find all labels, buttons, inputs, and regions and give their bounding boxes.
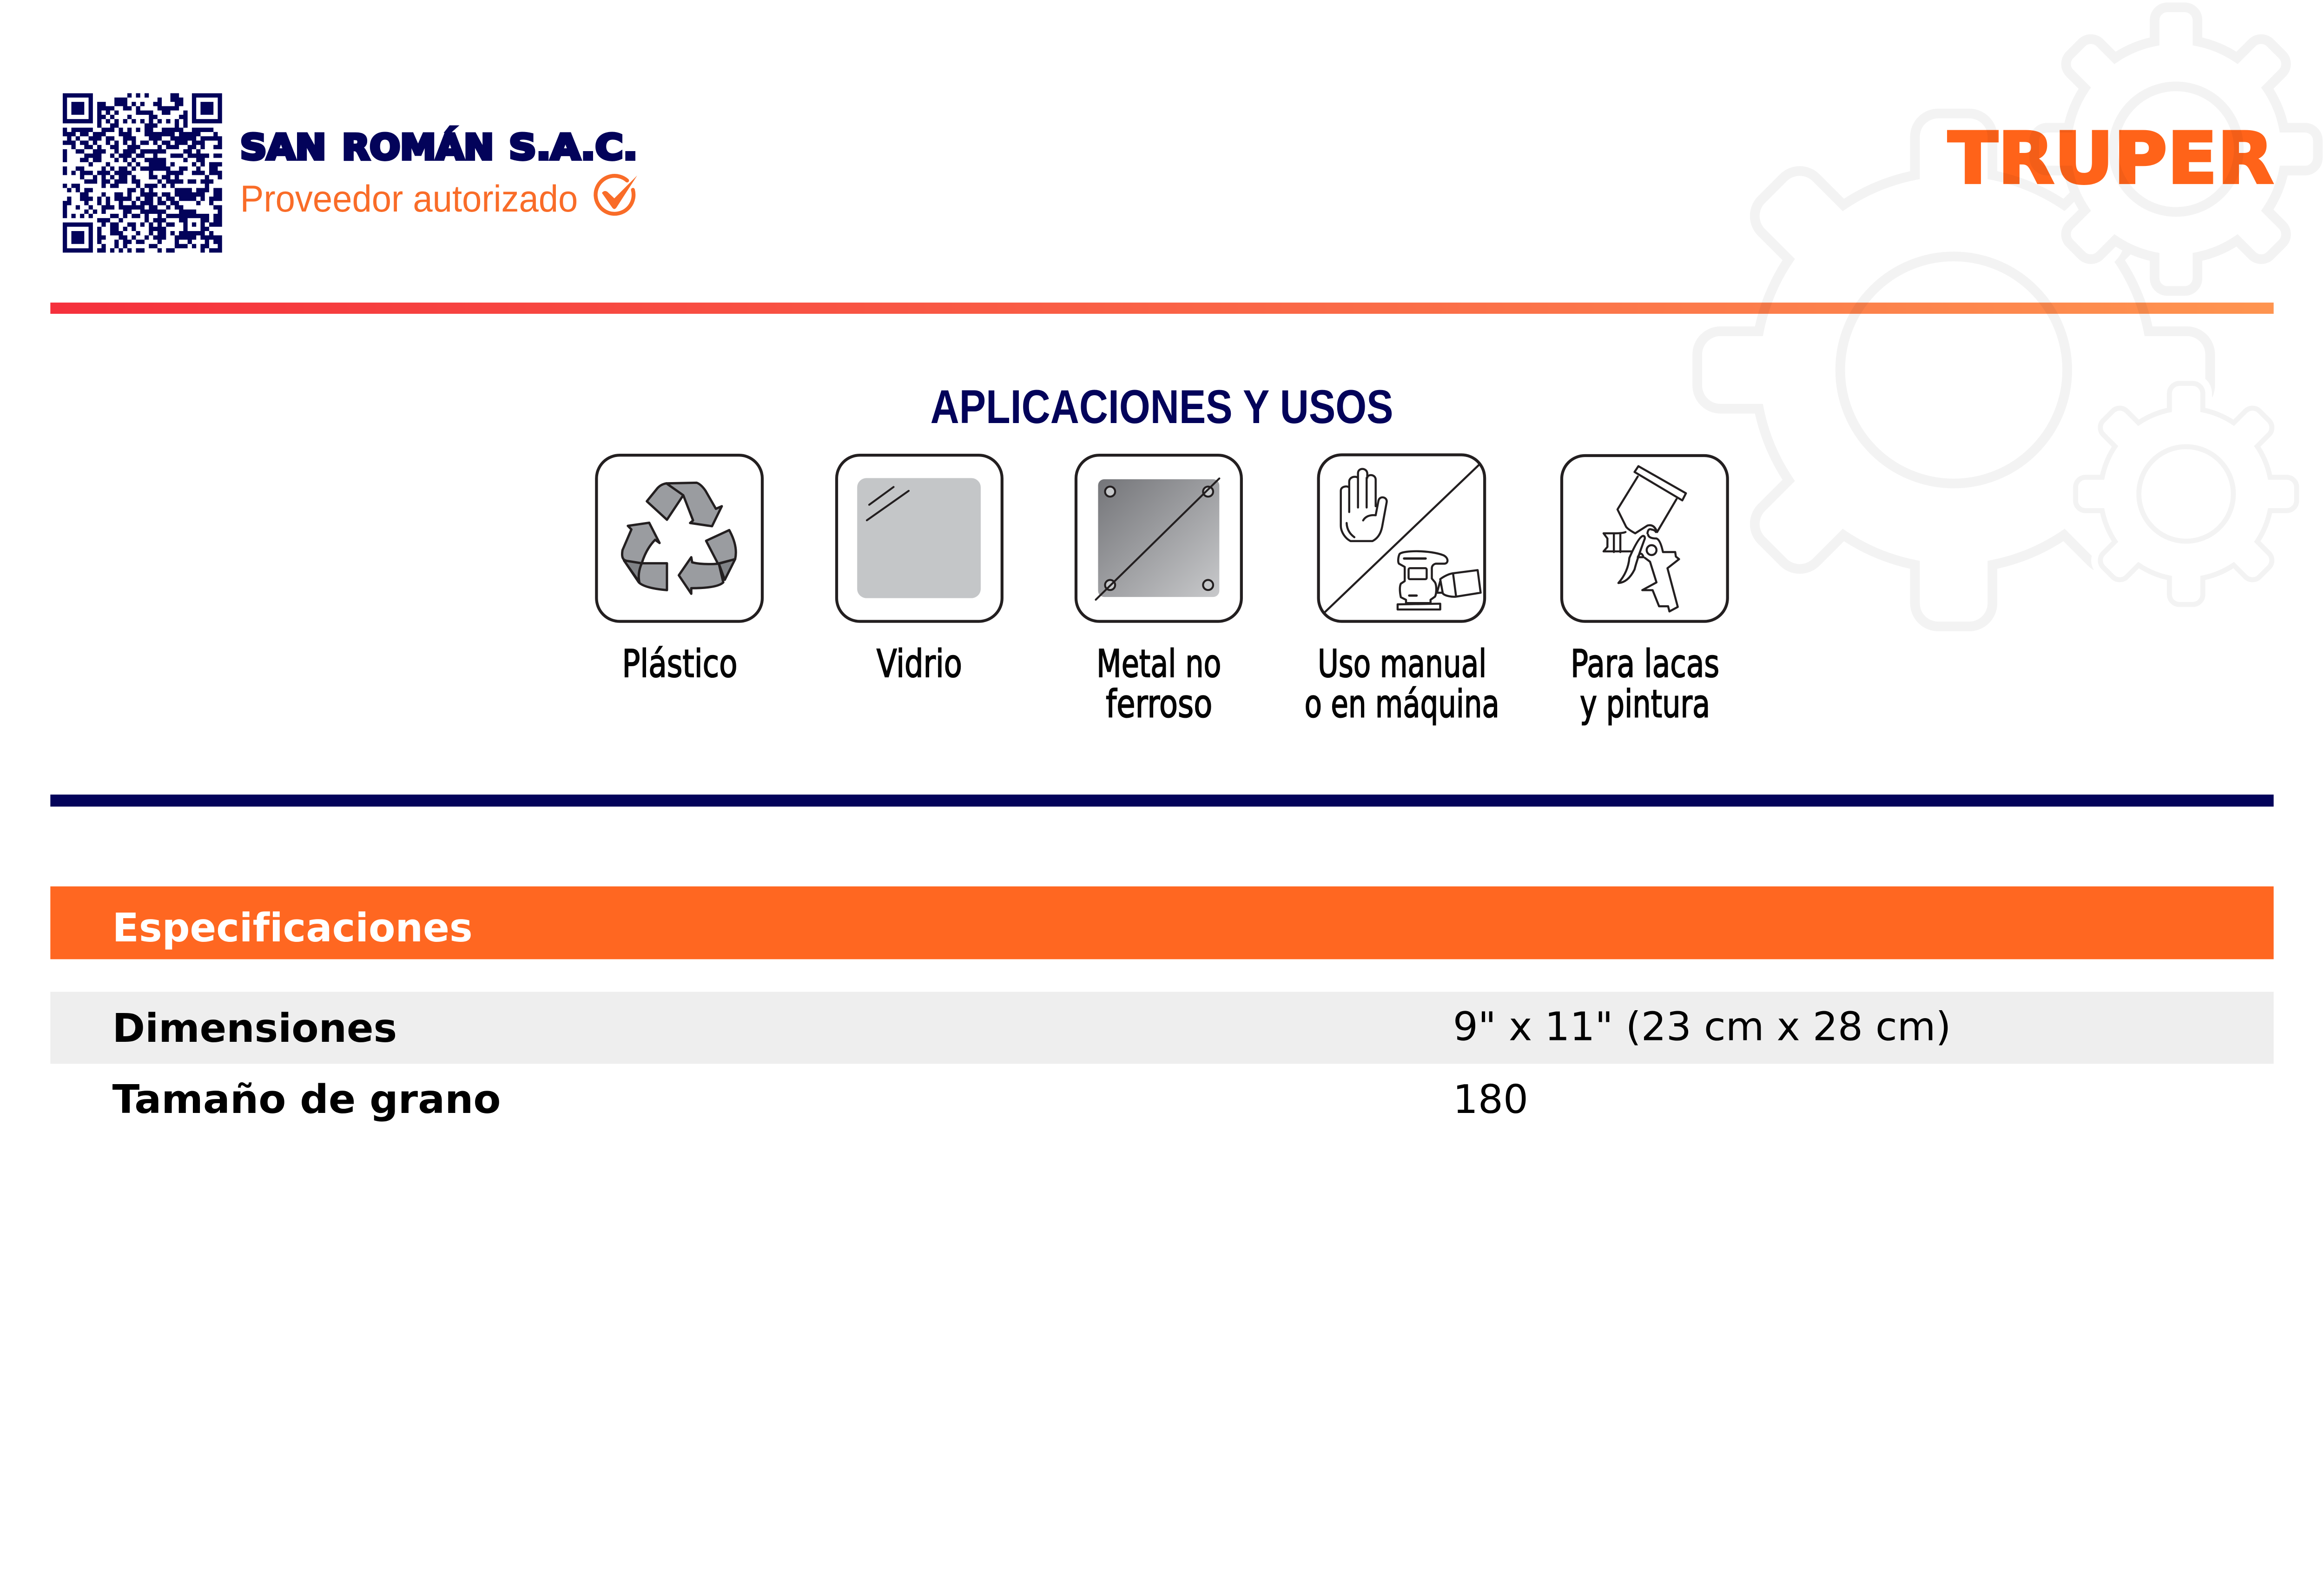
row: dimensions xyxy=(50,992,2274,1064)
authorized provider tagline: Proveedor autorizado xyxy=(240,178,578,220)
label: ferroso xyxy=(1106,682,1212,727)
company name: SAN xyxy=(240,126,326,168)
panel: plastic xyxy=(596,455,762,686)
Truper logo: TRUPER xyxy=(1948,117,2274,199)
panel: specifications table xyxy=(50,887,2274,1123)
row: grain size: Tamaño de grano xyxy=(112,1077,501,1123)
label xyxy=(1096,642,1221,727)
heading: applications and uses: APLICACIONES Y USOS xyxy=(931,380,1393,433)
icon: recycling arrows xyxy=(596,455,762,622)
icon: metal plate xyxy=(1076,455,1241,622)
top right gear xyxy=(2034,7,2318,291)
label: Vidrio xyxy=(877,642,962,686)
row: grain size: 180 xyxy=(1453,1077,1528,1123)
bottom right gear xyxy=(2076,384,2297,604)
table header xyxy=(50,887,2274,959)
label: y pintura xyxy=(1580,682,1710,727)
company name: S.A.C. xyxy=(509,126,638,168)
big gear xyxy=(1697,113,2219,627)
row: dimensions: 9" x 11" (23 cm x 28 cm) xyxy=(1453,1004,1951,1050)
QR code xyxy=(63,93,222,252)
icon: check mark in circle xyxy=(595,176,637,214)
label xyxy=(1571,642,1719,727)
panel: glass xyxy=(837,455,1002,686)
label: Plástico xyxy=(622,642,738,686)
icon: spray gun xyxy=(1562,456,1728,622)
company name xyxy=(240,126,638,167)
row: dimensions: Dimensiones xyxy=(112,1006,397,1052)
label: Uso manual xyxy=(1318,642,1486,686)
company name: ROMÁN xyxy=(342,126,494,168)
label: o en máquina xyxy=(1305,682,1499,727)
panel: lacquers and paint xyxy=(1562,456,1728,727)
header: distributor QR and name xyxy=(63,93,638,252)
table header: Especificaciones xyxy=(112,905,473,951)
gradient divider bar xyxy=(50,303,2274,314)
icon: glass pane xyxy=(837,455,1002,622)
label: Para lacas xyxy=(1571,642,1719,686)
background gears watermark xyxy=(1697,7,2318,627)
panel: manual or machine use xyxy=(1305,455,1499,727)
label xyxy=(1305,642,1499,727)
navy divider bar xyxy=(50,794,2274,807)
label: Metal no xyxy=(1096,642,1221,686)
panel: non-ferrous metal xyxy=(1076,455,1241,727)
row: grain size xyxy=(112,1077,1528,1123)
icon: hand and sander xyxy=(1319,455,1485,622)
